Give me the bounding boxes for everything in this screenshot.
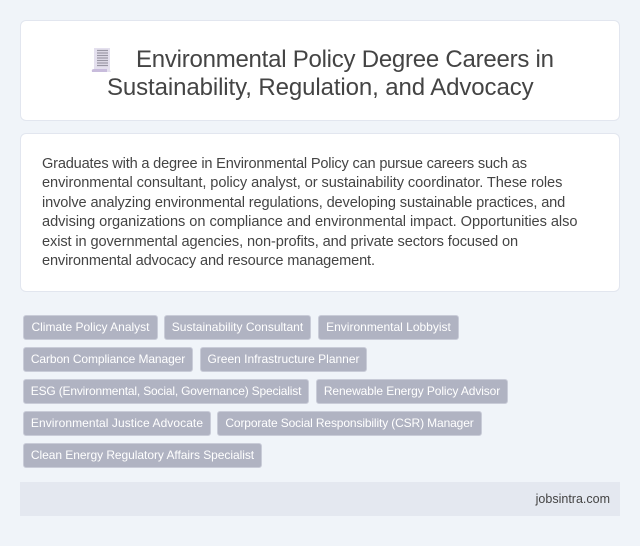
description paragraph: Graduates with a degree in Environmental Policy can pursue careers such as <box>42 156 527 172</box>
title text <box>107 46 554 101</box>
tag <box>316 379 508 404</box>
tag <box>23 315 158 340</box>
title text: Environmental Policy Degree Careers in <box>136 46 554 73</box>
panel: title card <box>20 20 620 121</box>
tag: Carbon Compliance Manager <box>31 352 185 366</box>
tag <box>23 347 193 372</box>
tag: Environmental Lobbyist <box>326 320 451 334</box>
tag <box>23 379 309 404</box>
tag <box>23 411 211 436</box>
tag <box>23 443 262 468</box>
tag: Environmental Justice Advocate <box>31 416 203 430</box>
description paragraph <box>42 156 577 269</box>
icon: policy document scroll <box>92 48 111 72</box>
tag <box>318 315 459 340</box>
tag: Renewable Energy Policy Advisor <box>324 384 500 398</box>
title text: Sustainability, Regulation, and Advocacy <box>107 74 534 101</box>
description paragraph: exist in governmental agencies, non-profits, and private sectors focused on <box>42 234 518 250</box>
description paragraph: environmental consultant, policy analyst, or sustainability coordinator. These roles <box>42 175 562 191</box>
tag <box>200 347 367 372</box>
footer source text: jobsintra.com <box>536 492 610 506</box>
tag: Climate Policy Analyst <box>31 320 150 334</box>
career tags <box>23 315 508 468</box>
panel: description text block <box>20 133 620 292</box>
tag: Green Infrastructure Planner <box>207 352 360 366</box>
footer bar <box>20 482 620 516</box>
tag: ESG (Environmental, Social, Governance) Specialist <box>31 384 301 398</box>
tag: Corporate Social Responsibility (CSR) Manager <box>225 416 474 430</box>
tag: Sustainability Consultant <box>172 320 303 334</box>
description paragraph: involve analyzing environmental regulations, developing sustainable practices, and <box>42 195 565 211</box>
tag <box>217 411 482 436</box>
description paragraph: environmental advocacy and resource management. <box>42 253 375 269</box>
tag: Clean Energy Regulatory Affairs Specialist <box>31 448 254 462</box>
description paragraph: advising organizations on compliance and environmental impact. Opportunities also <box>42 214 577 230</box>
tag <box>164 315 311 340</box>
